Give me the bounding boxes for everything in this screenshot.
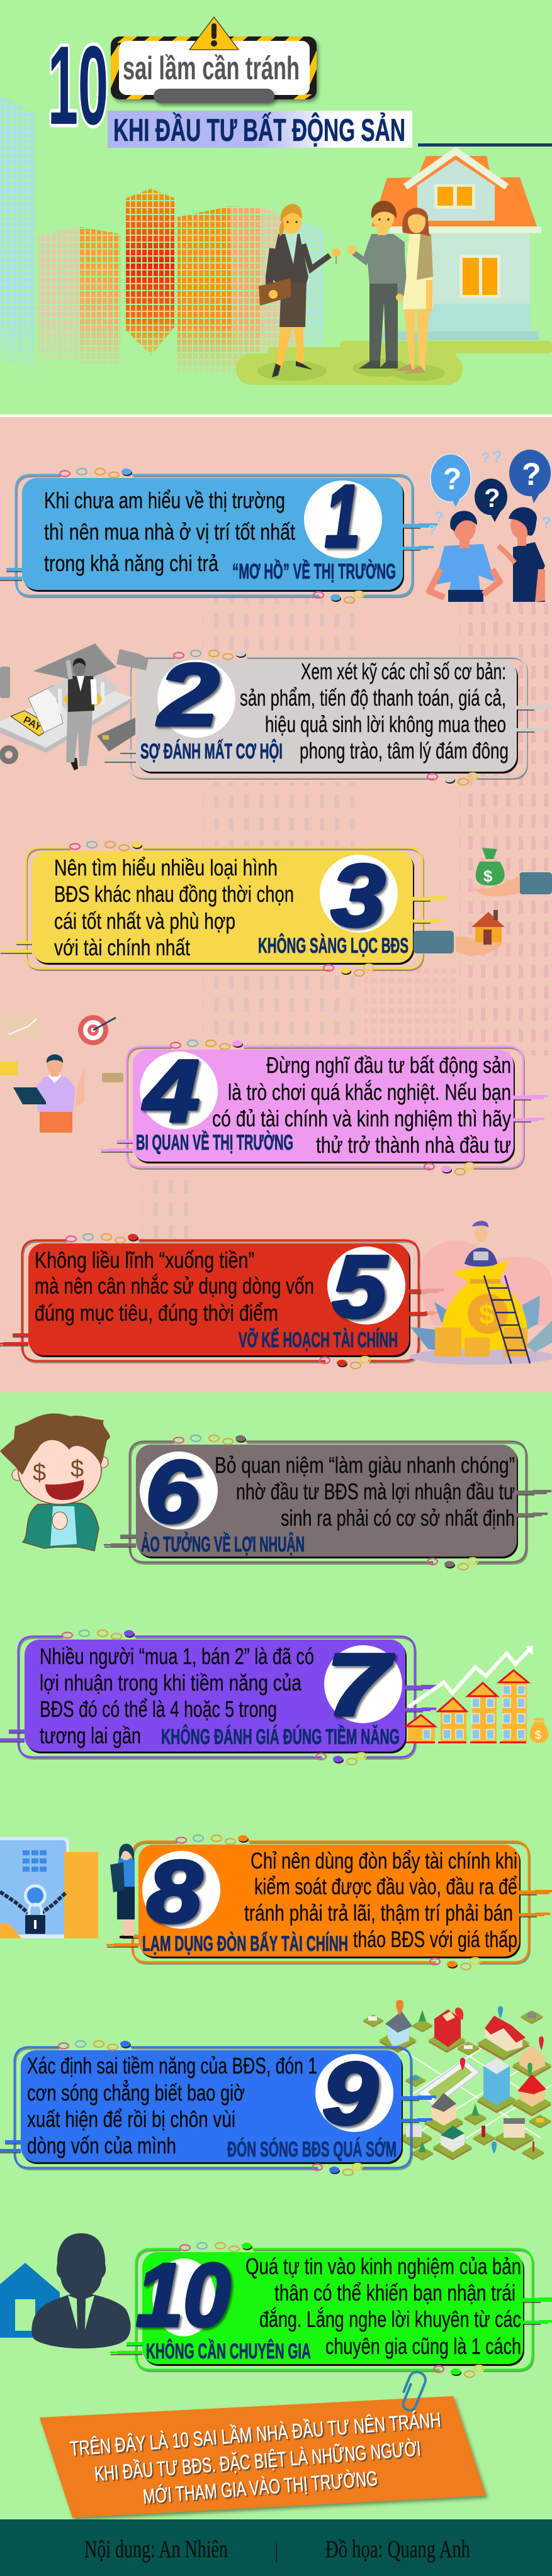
panel 3 body text: BĐS khác nhau đồng thời chọn <box>54 881 294 907</box>
illustration: house <box>371 151 541 340</box>
panel 9 body text: Xác định sai tiềm năng của BĐS, đón 1 <box>27 2053 317 2079</box>
panel 2 frame <box>104 650 551 785</box>
panel 6 number badge <box>140 1442 218 1541</box>
illustration: hands exchanging money and house: $ <box>483 867 493 886</box>
panel 7 body text: BĐS đó có thể là 4 hoặc 5 trong <box>40 1696 277 1722</box>
panel 2 number badge: 2 <box>156 645 219 744</box>
illustration: two confused people: ? <box>482 450 490 465</box>
panel 8 body text <box>244 1848 517 1952</box>
title: highlighted subtitle: KHI ĐẦU TƯ BẤT ĐỘNG SẢN <box>113 112 405 148</box>
panel 7: không đánh giá đúng tiềm năng <box>0 1630 440 1765</box>
panel 2 label: SỢ ĐÁNH MẤT CƠ HỘI <box>140 739 283 763</box>
panel 10: không cần chuyên gia <box>110 2243 552 2377</box>
panel 5 frame <box>0 1234 444 1368</box>
panel 6 number badge: 6 <box>145 1442 200 1541</box>
panel 4 body text <box>212 1052 511 1158</box>
panel 7 label: KHÔNG ĐÁNH GIÁ ĐÚNG TIỀM NĂNG <box>161 1724 400 1749</box>
panel 7 body text: Nhiều người “mua 1, bán 2” là đã có <box>40 1643 314 1669</box>
illustration: two confused people: ? <box>522 457 541 492</box>
footer credit: graphics: Đồ họa: Quang Anh <box>325 2536 470 2563</box>
closing note text <box>69 2408 442 2508</box>
illustration: payment and banking <box>0 643 149 770</box>
panel 1 body text <box>44 487 295 576</box>
panel 1 body text: Khi chưa am hiểu về thị trường <box>44 487 285 513</box>
illustration: city skyscrapers <box>0 96 324 377</box>
panel 9 body text <box>27 2053 317 2158</box>
panel 1 number badge: 1 <box>325 467 360 565</box>
panel 6 body text <box>215 1452 515 1531</box>
footer divider <box>276 2543 277 2563</box>
background: pink section <box>0 416 552 1392</box>
panel 7 number badge: 7 <box>326 1635 394 1734</box>
illustration: two confused people: ? <box>443 463 461 496</box>
panel 4 number badge <box>140 1041 218 1140</box>
panel 5 label: VỠ KẾ HOẠCH TÀI CHÍNH <box>239 1328 398 1352</box>
panel 1 body text: thì nên mua nhà ở vị trí tốt nhất <box>44 519 295 545</box>
title: warning sign with striped frame <box>111 17 317 103</box>
panel 7 body text <box>40 1643 314 1748</box>
panel 7 frame <box>0 1630 440 1765</box>
closing note text: MỚI THAM GIA VÀO THỊ TRƯỜNG <box>142 2467 378 2508</box>
panel 6 label: ẢO TƯỞNG VỀ LỢI NHUẬN <box>141 1533 305 1557</box>
panel 9 body text: cơn sóng chẳng biết bao giờ <box>27 2079 245 2106</box>
closing note text: KHI ĐẦU TƯ BĐS. ĐẶC BIỆT LÀ NHỮNG NGƯỜI <box>94 2436 422 2485</box>
panel 5 body text: Không liều lĩnh “xuống tiền” <box>35 1247 254 1273</box>
illustration: isometric city map <box>363 2000 552 2160</box>
illustration: investor with laptop and target <box>0 1014 123 1133</box>
panel 4 number badge: 4 <box>142 1041 200 1140</box>
panel 3 label: KHÔNG SÀNG LỌC BĐS <box>258 933 408 958</box>
panel 3 body text: với tài chính nhất <box>54 935 190 960</box>
panel 7 body text: tương lai gần <box>40 1723 141 1748</box>
illustration: money bag with ladder <box>410 1221 552 1365</box>
panel 4: bi quan về thị trường <box>101 1040 548 1175</box>
panel 5 body text <box>35 1247 314 1326</box>
panel 8 label: LẠM DỤNG ĐÒN BẨY TÀI CHÍNH <box>142 1932 348 1956</box>
panel 9 number badge <box>315 2044 393 2143</box>
panel 10 frame <box>110 2243 552 2377</box>
panel 5 body text: mà nên cân nhắc sử dụng dòng vốn <box>35 1273 314 1299</box>
panel 5 body text: đúng mục tiêu, đúng thời điểm <box>35 1300 278 1326</box>
infographic canvas: 10 <box>48 23 108 148</box>
title underline <box>418 143 552 147</box>
panel 3 number badge <box>320 846 398 945</box>
panel 8 number badge <box>142 1842 220 1941</box>
panel 10 number badge: 10 <box>136 2245 230 2345</box>
footer <box>0 2519 552 2576</box>
illustration: locked safe with coins <box>0 1837 135 1938</box>
panel 8: lạm dụng đòn bẩy tài chính <box>106 1835 552 1970</box>
panel 3 body text <box>54 855 294 960</box>
panel 9 frame <box>0 2041 436 2175</box>
title: highlighted subtitle <box>108 111 412 148</box>
panel 10 label: KHÔNG CẦN CHUYÊN GIA <box>146 2339 311 2363</box>
illustration: money bag with ladder: $ <box>479 1299 494 1330</box>
panel 5 number badge <box>327 1237 405 1336</box>
panel 1 frame <box>0 469 437 603</box>
icon: paperclip <box>398 2370 428 2412</box>
panel 3 body text: Nên tìm hiểu nhiều loại hình <box>54 855 278 880</box>
panel 5: vỡ kế hoạch tài chính <box>0 1234 444 1368</box>
panel 1 label: “MƠ HỒ” VỀ THỊ TRƯỜNG <box>232 560 396 584</box>
illustration: cartoon man with dollar eyes: $ <box>70 1456 84 1482</box>
illustration: couple <box>347 201 433 374</box>
panel 1 number badge <box>304 467 382 565</box>
illustration: payment and banking: PAY <box>21 715 43 733</box>
panel 2: sợ đánh mất cơ hội <box>104 645 551 785</box>
illustration: lawn <box>236 341 552 385</box>
illustration: two confused people: ? <box>484 483 500 513</box>
panel 9 number badge: 9 <box>322 2044 378 2143</box>
closing note card <box>40 2396 486 2518</box>
panel 10 body text <box>245 2253 521 2359</box>
illustration: two confused people: ? <box>428 522 436 538</box>
panel 2 number badge <box>156 645 235 744</box>
panel 3 frame <box>0 841 448 976</box>
panel 9 body text: xuất hiện để rồi bị chôn vùi <box>27 2106 235 2132</box>
illustration: two confused people: ? <box>541 513 551 532</box>
panel 3: không sàng lọc BĐS <box>0 841 448 976</box>
panel 1: mơ hồ về thị trường <box>0 467 437 603</box>
background: green lower section <box>0 1392 552 2519</box>
panel 8 number badge: 8 <box>147 1842 202 1941</box>
panel 4 label: BI QUAN VỀ THỊ TRƯỜNG <box>136 1131 293 1155</box>
background: green header <box>0 0 552 416</box>
illustration: rising arrow over houses: $ <box>535 1729 541 1741</box>
illustration: cartoon man with dollar eyes: $ <box>33 1460 46 1486</box>
panel 8 frame <box>106 1835 552 1970</box>
panel 7 number badge <box>324 1635 402 1734</box>
title: sai lầm cần tránh: sai lầm cần tránh <box>123 50 300 87</box>
panel 9 body text: dòng vốn của mình <box>27 2133 176 2158</box>
panel 7 body text: lợi nhuận trong khi tiềm năng của <box>40 1670 302 1696</box>
footer credit: content: Nội dung: An Nhiên <box>84 2536 228 2563</box>
panel 9 label: ĐÓN SÓNG BĐS QUÁ SỚM <box>227 2138 397 2162</box>
illustration: two confused people: ? <box>492 447 502 466</box>
illustration: two confused people <box>428 447 551 602</box>
panel 3 body text: cái tốt nhất và phù hợp <box>54 908 235 934</box>
panel 9: đón sóng BĐS quá sớm <box>0 2000 552 2175</box>
panel 1 body text: trong khả năng chi trả <box>44 550 219 576</box>
illustration: businessman silhouette with house <box>0 2233 131 2348</box>
panel 6: ảo tưởng về lợi nhuận <box>104 1435 551 1570</box>
panel 2 body text <box>240 658 509 763</box>
illustration: real estate agent <box>259 204 341 377</box>
illustration: two confused people: ? <box>434 509 444 526</box>
illustration: rising arrow over houses <box>406 1646 548 1743</box>
panel 5 number badge: 5 <box>332 1237 388 1336</box>
illustration: hands exchanging money and house <box>414 848 552 955</box>
panel 6 frame <box>104 1435 551 1570</box>
panel 3 number badge: 3 <box>331 846 385 945</box>
illustration: cartoon man with dollar eyes <box>0 1413 110 1551</box>
background: faded building pattern in pink section <box>142 597 552 1240</box>
panel 4 frame <box>101 1040 548 1175</box>
